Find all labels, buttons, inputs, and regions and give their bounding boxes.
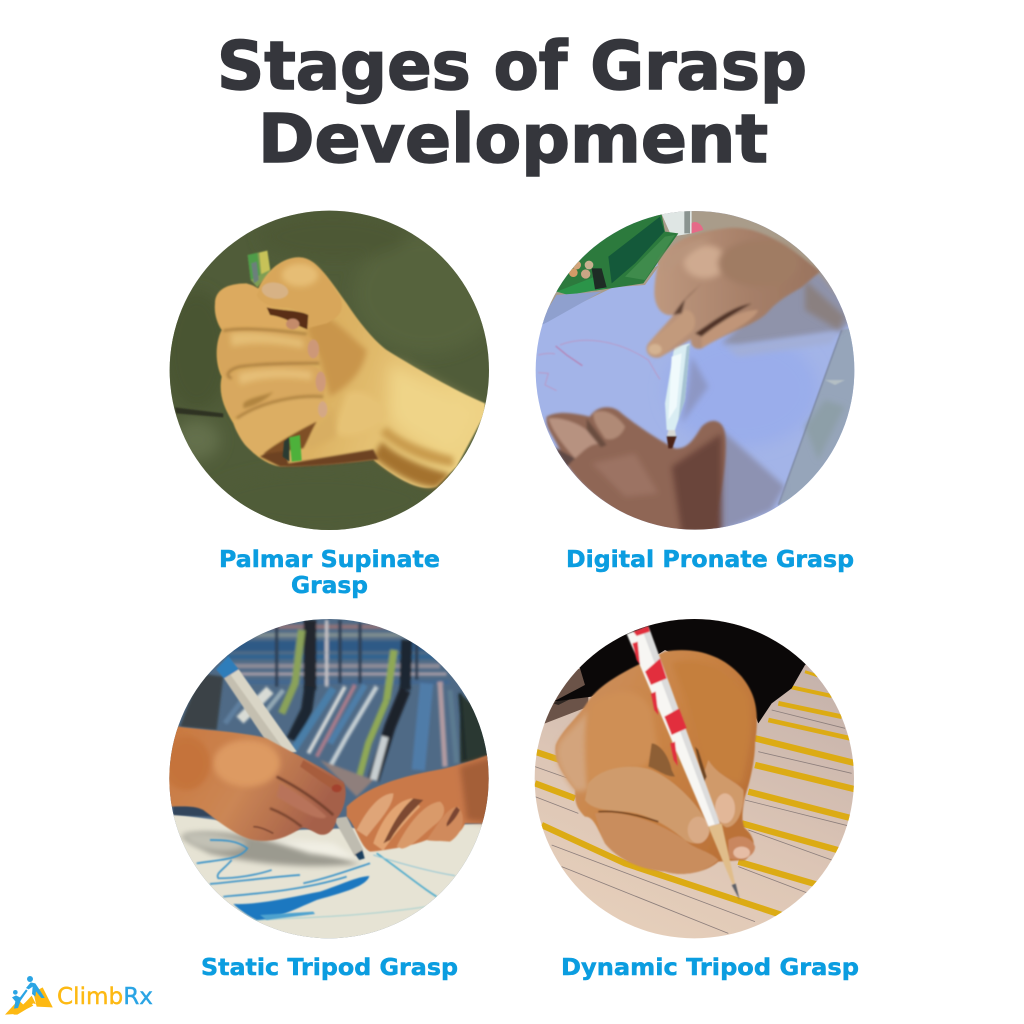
marker [216, 656, 297, 757]
panel: digital pronate grasp photo [536, 211, 854, 530]
crayon bottom [283, 435, 302, 462]
fist and arm [215, 257, 485, 488]
label: palmar supinate grasp: Grasp [291, 573, 368, 599]
title [217, 27, 807, 178]
marker lower [333, 817, 365, 860]
ruled paper lines [535, 672, 858, 933]
pencil [627, 626, 740, 900]
paper with drawing [174, 814, 482, 938]
crayon top [248, 251, 271, 287]
title: Stages of Grasp [217, 27, 807, 105]
blue scribbles [197, 840, 455, 920]
paper shadow and right strip [778, 327, 858, 505]
faint pen scribbles [538, 340, 660, 391]
upper hand [646, 228, 820, 358]
icon: mountain with climbers [5, 976, 53, 1015]
hand [555, 650, 757, 874]
black sleeve and desk [544, 668, 588, 724]
panel: dynamic tripod grasp photo [534, 619, 854, 938]
right hand [347, 753, 493, 852]
panel: static tripod grasp photo [169, 619, 489, 938]
logo: ClimbRx: ClimbRx [57, 984, 153, 1010]
lower hand [546, 407, 726, 533]
logo: ClimbRx [5, 976, 153, 1015]
label: palmar supinate grasp: Palmar Supinate [219, 547, 440, 573]
title: Development [258, 100, 768, 178]
panel: palmar supinate grasp photo [170, 210, 489, 530]
label: dynamic tripod grasp: Dynamic Tripod Grasp [561, 955, 859, 981]
background objects [544, 211, 837, 321]
label: palmar supinate grasp [219, 547, 440, 599]
marker [665, 343, 690, 448]
left hand [163, 725, 346, 841]
label: digital pronate grasp: Digital Pronate Grasp [566, 547, 854, 573]
plaid shirt [180, 620, 493, 797]
label: static tripod grasp: Static Tripod Grasp [201, 955, 458, 981]
